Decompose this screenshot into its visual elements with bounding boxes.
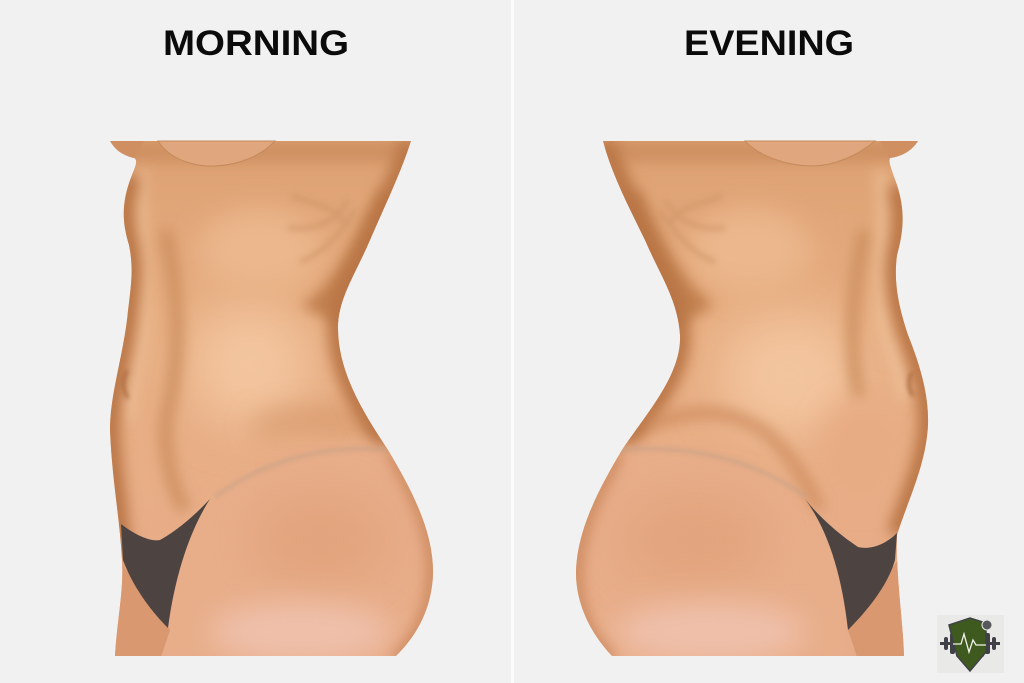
title: morning: MORNING [163, 24, 349, 63]
figure: evening torso [570, 130, 935, 665]
arm detail [110, 141, 144, 158]
logo: shield with barbell [937, 615, 1004, 673]
pulse line [953, 634, 986, 652]
garment [805, 499, 897, 630]
barbell [940, 630, 1000, 657]
belly fold [650, 413, 820, 510]
edge shading [603, 141, 928, 535]
shield [949, 618, 986, 671]
figure: morning torso [100, 130, 445, 665]
title: evening: EVENING [684, 24, 854, 63]
edge shading [110, 141, 411, 560]
leg behind [848, 560, 904, 656]
arm detail [880, 141, 918, 158]
chest detail [158, 141, 275, 166]
hip [362, 439, 433, 656]
leg behind [115, 564, 170, 656]
navel [909, 372, 913, 396]
waist shadow crease [255, 419, 365, 428]
stopwatch [982, 620, 992, 630]
chest detail [745, 141, 875, 166]
navel morning [123, 370, 128, 398]
hip [576, 438, 646, 656]
garment [121, 499, 210, 628]
panel divider [511, 0, 514, 683]
